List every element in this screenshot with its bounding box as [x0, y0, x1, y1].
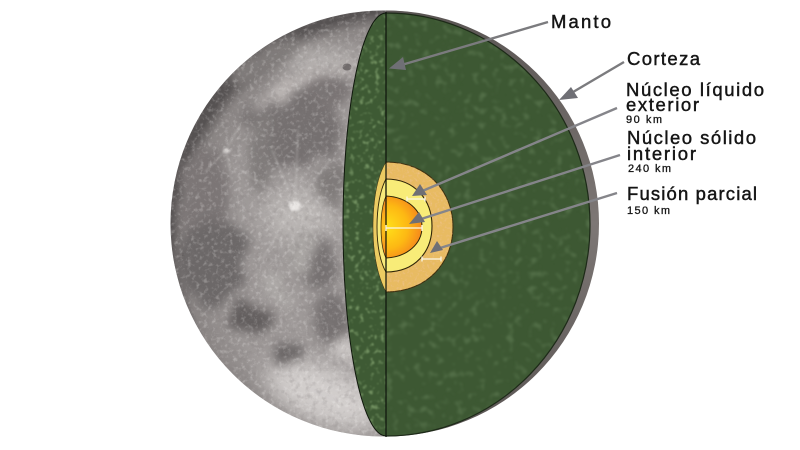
- arrow: Corteza: [559, 62, 624, 100]
- crater rays: [205, 125, 340, 260]
- bright highlands and ejecta: [257, 66, 357, 364]
- arrow: Fusión parcial: [430, 193, 617, 253]
- label: Fusión parcial 150 km: [627, 183, 757, 217]
- label: Corteza: Corteza: [627, 48, 701, 69]
- label: Fusión parcial 150 km: Fusión parcial: [627, 183, 757, 204]
- label: Manto: Manto: [551, 11, 611, 32]
- label: Núcleo líquido exterior 90 km: Núcleo líquido: [626, 79, 764, 100]
- central cut line: [385, 12, 387, 437]
- dark maria: [176, 33, 352, 363]
- mantle: cut face right: [386, 13, 592, 437]
- label: Núcleo líquido exterior 90 km: 90 km: [626, 114, 662, 126]
- surface grain: [165, 5, 390, 443]
- outer liquid core: [377, 179, 432, 272]
- label: Núcleo líquido exterior 90 km: exterior: [626, 94, 699, 115]
- label: Núcleo sólido interior 240 km: Núcleo sólido: [627, 127, 756, 148]
- arrow: Manto: [389, 22, 548, 70]
- label: Fusión parcial 150 km: 150 km: [627, 205, 670, 217]
- scale bars: [386, 196, 441, 262]
- arrow: Núcleo sólido interior: [409, 155, 620, 224]
- arrow: Núcleo líquido exterior: [412, 108, 617, 196]
- label: Núcleo sólido interior 240 km: 240 km: [628, 163, 671, 175]
- broad bright glow zones: [258, 38, 378, 436]
- label: Núcleo sólido interior 240 km: interior: [627, 143, 696, 164]
- moon sphere: [170, 10, 404, 436]
- mantle: cut face left wedge: [343, 13, 387, 437]
- partial melt layer: [373, 160, 454, 294]
- inner solid core: [381, 196, 422, 258]
- crust rim: [386, 10, 599, 437]
- label: Núcleo sólido interior 240 km: [627, 127, 756, 175]
- label: Núcleo líquido exterior 90 km: [626, 79, 764, 126]
